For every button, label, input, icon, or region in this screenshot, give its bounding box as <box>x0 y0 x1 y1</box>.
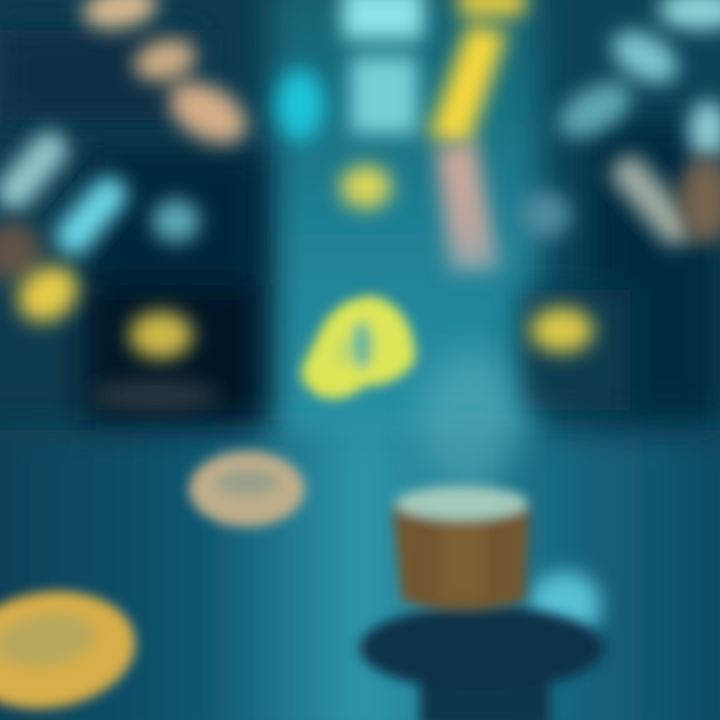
icon: faint shelf item <box>90 379 220 411</box>
icon: yellow coin in dark alcove <box>129 311 193 359</box>
icon: yellow coin centre <box>340 165 392 209</box>
icon: pink pill <box>436 142 500 272</box>
icon: pale cyan blocks <box>342 0 424 134</box>
icon: bright cyan block <box>276 69 324 141</box>
panel: dark left alcove <box>85 150 265 420</box>
icon: brown pill right <box>678 156 720 244</box>
icon: brown block left <box>0 222 42 282</box>
icon: steam <box>420 350 520 490</box>
panel: dark right alcove <box>520 120 720 420</box>
icon: cyan saucer glow <box>529 571 601 639</box>
icon: coffee cup <box>393 486 530 611</box>
icon: large yellow dollar blob <box>301 296 416 399</box>
icon: yellow coin right <box>530 307 594 353</box>
icon: gold coin bottom left <box>0 580 143 720</box>
icon: tan pill right <box>605 149 700 252</box>
icon: yellow coin left <box>7 254 89 334</box>
icon: faint grey-blue item <box>519 191 571 239</box>
icon: saucer and stand <box>360 606 604 720</box>
icon: tan pills top left <box>79 0 257 157</box>
panel: dark top-left band <box>0 30 200 120</box>
icon: yellow pill <box>428 0 526 148</box>
icon: donut <box>189 451 305 527</box>
icon: small teal block <box>152 199 200 243</box>
icon: pale pill left <box>0 125 75 217</box>
icon: cyan pill left <box>49 170 134 262</box>
icon: pale pills top right <box>549 0 720 160</box>
